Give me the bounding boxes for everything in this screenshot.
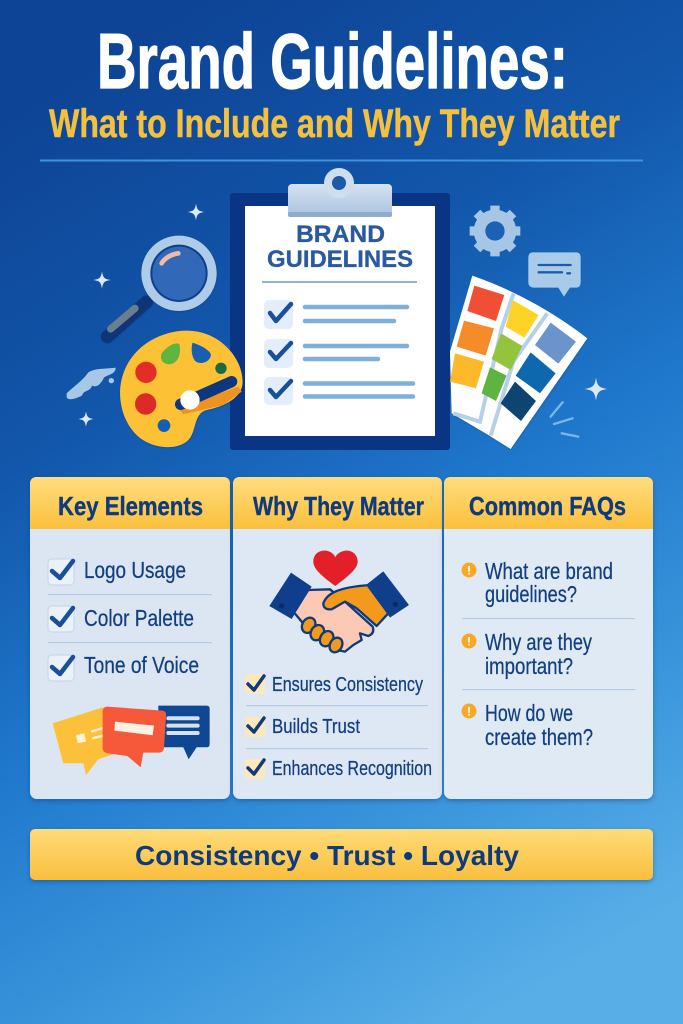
list: faqs: create them? bbox=[485, 724, 593, 750]
list: why they matter: Builds Trust bbox=[272, 716, 360, 738]
icon: colour swatches bbox=[450, 276, 587, 449]
list: key elements: Color Palette bbox=[84, 605, 194, 631]
list: faqs: ! bbox=[467, 564, 471, 578]
panel: why they matter bbox=[233, 477, 442, 799]
icon: gear bbox=[470, 206, 520, 256]
clipboard heading: BRAND bbox=[296, 221, 385, 248]
list: key elements: Logo Usage bbox=[84, 557, 186, 583]
panel: key elements bbox=[30, 477, 230, 799]
heading: common faqs: Common FAQs bbox=[469, 491, 626, 521]
icon: magnifying glass bbox=[107, 236, 217, 337]
panel: common faqs bbox=[444, 477, 653, 799]
icon: sparkles bbox=[78, 204, 607, 427]
list: key elements: Tone of Voice bbox=[84, 652, 199, 678]
icon: paint palette bbox=[120, 331, 243, 447]
icon: chat bubbles bbox=[53, 706, 210, 775]
list: faqs bbox=[462, 558, 635, 750]
list: faqs: What are brand bbox=[485, 558, 613, 584]
clipboard bbox=[230, 168, 450, 450]
clipboard heading bbox=[267, 221, 413, 273]
banner bbox=[30, 829, 653, 880]
icon: handshake with heart bbox=[269, 551, 409, 655]
list: faqs: guidelines? bbox=[485, 581, 577, 607]
clipboard checklist bbox=[264, 300, 413, 405]
clipboard heading: GUIDELINES bbox=[267, 246, 413, 273]
banner text: Consistency • Trust • Loyalty bbox=[135, 840, 519, 871]
list: faqs: ! bbox=[467, 634, 471, 648]
list: key elements bbox=[48, 557, 212, 681]
icon: motion dashes bbox=[551, 402, 578, 437]
list: why they matter bbox=[245, 674, 432, 780]
heading: key elements: Key Elements bbox=[58, 491, 203, 521]
list: faqs: How do we bbox=[485, 700, 573, 726]
list: faqs: important? bbox=[485, 653, 573, 679]
list: why they matter: Enhances Recognition bbox=[272, 758, 432, 780]
icon: paint splash bbox=[67, 368, 116, 399]
list: faqs: Why are they bbox=[485, 629, 592, 655]
heading: why they matter: Why They Matter bbox=[253, 491, 424, 521]
icon: speech bubble bbox=[528, 252, 581, 297]
list: why they matter: Ensures Consistency bbox=[272, 674, 423, 696]
list: faqs: ! bbox=[467, 704, 471, 718]
